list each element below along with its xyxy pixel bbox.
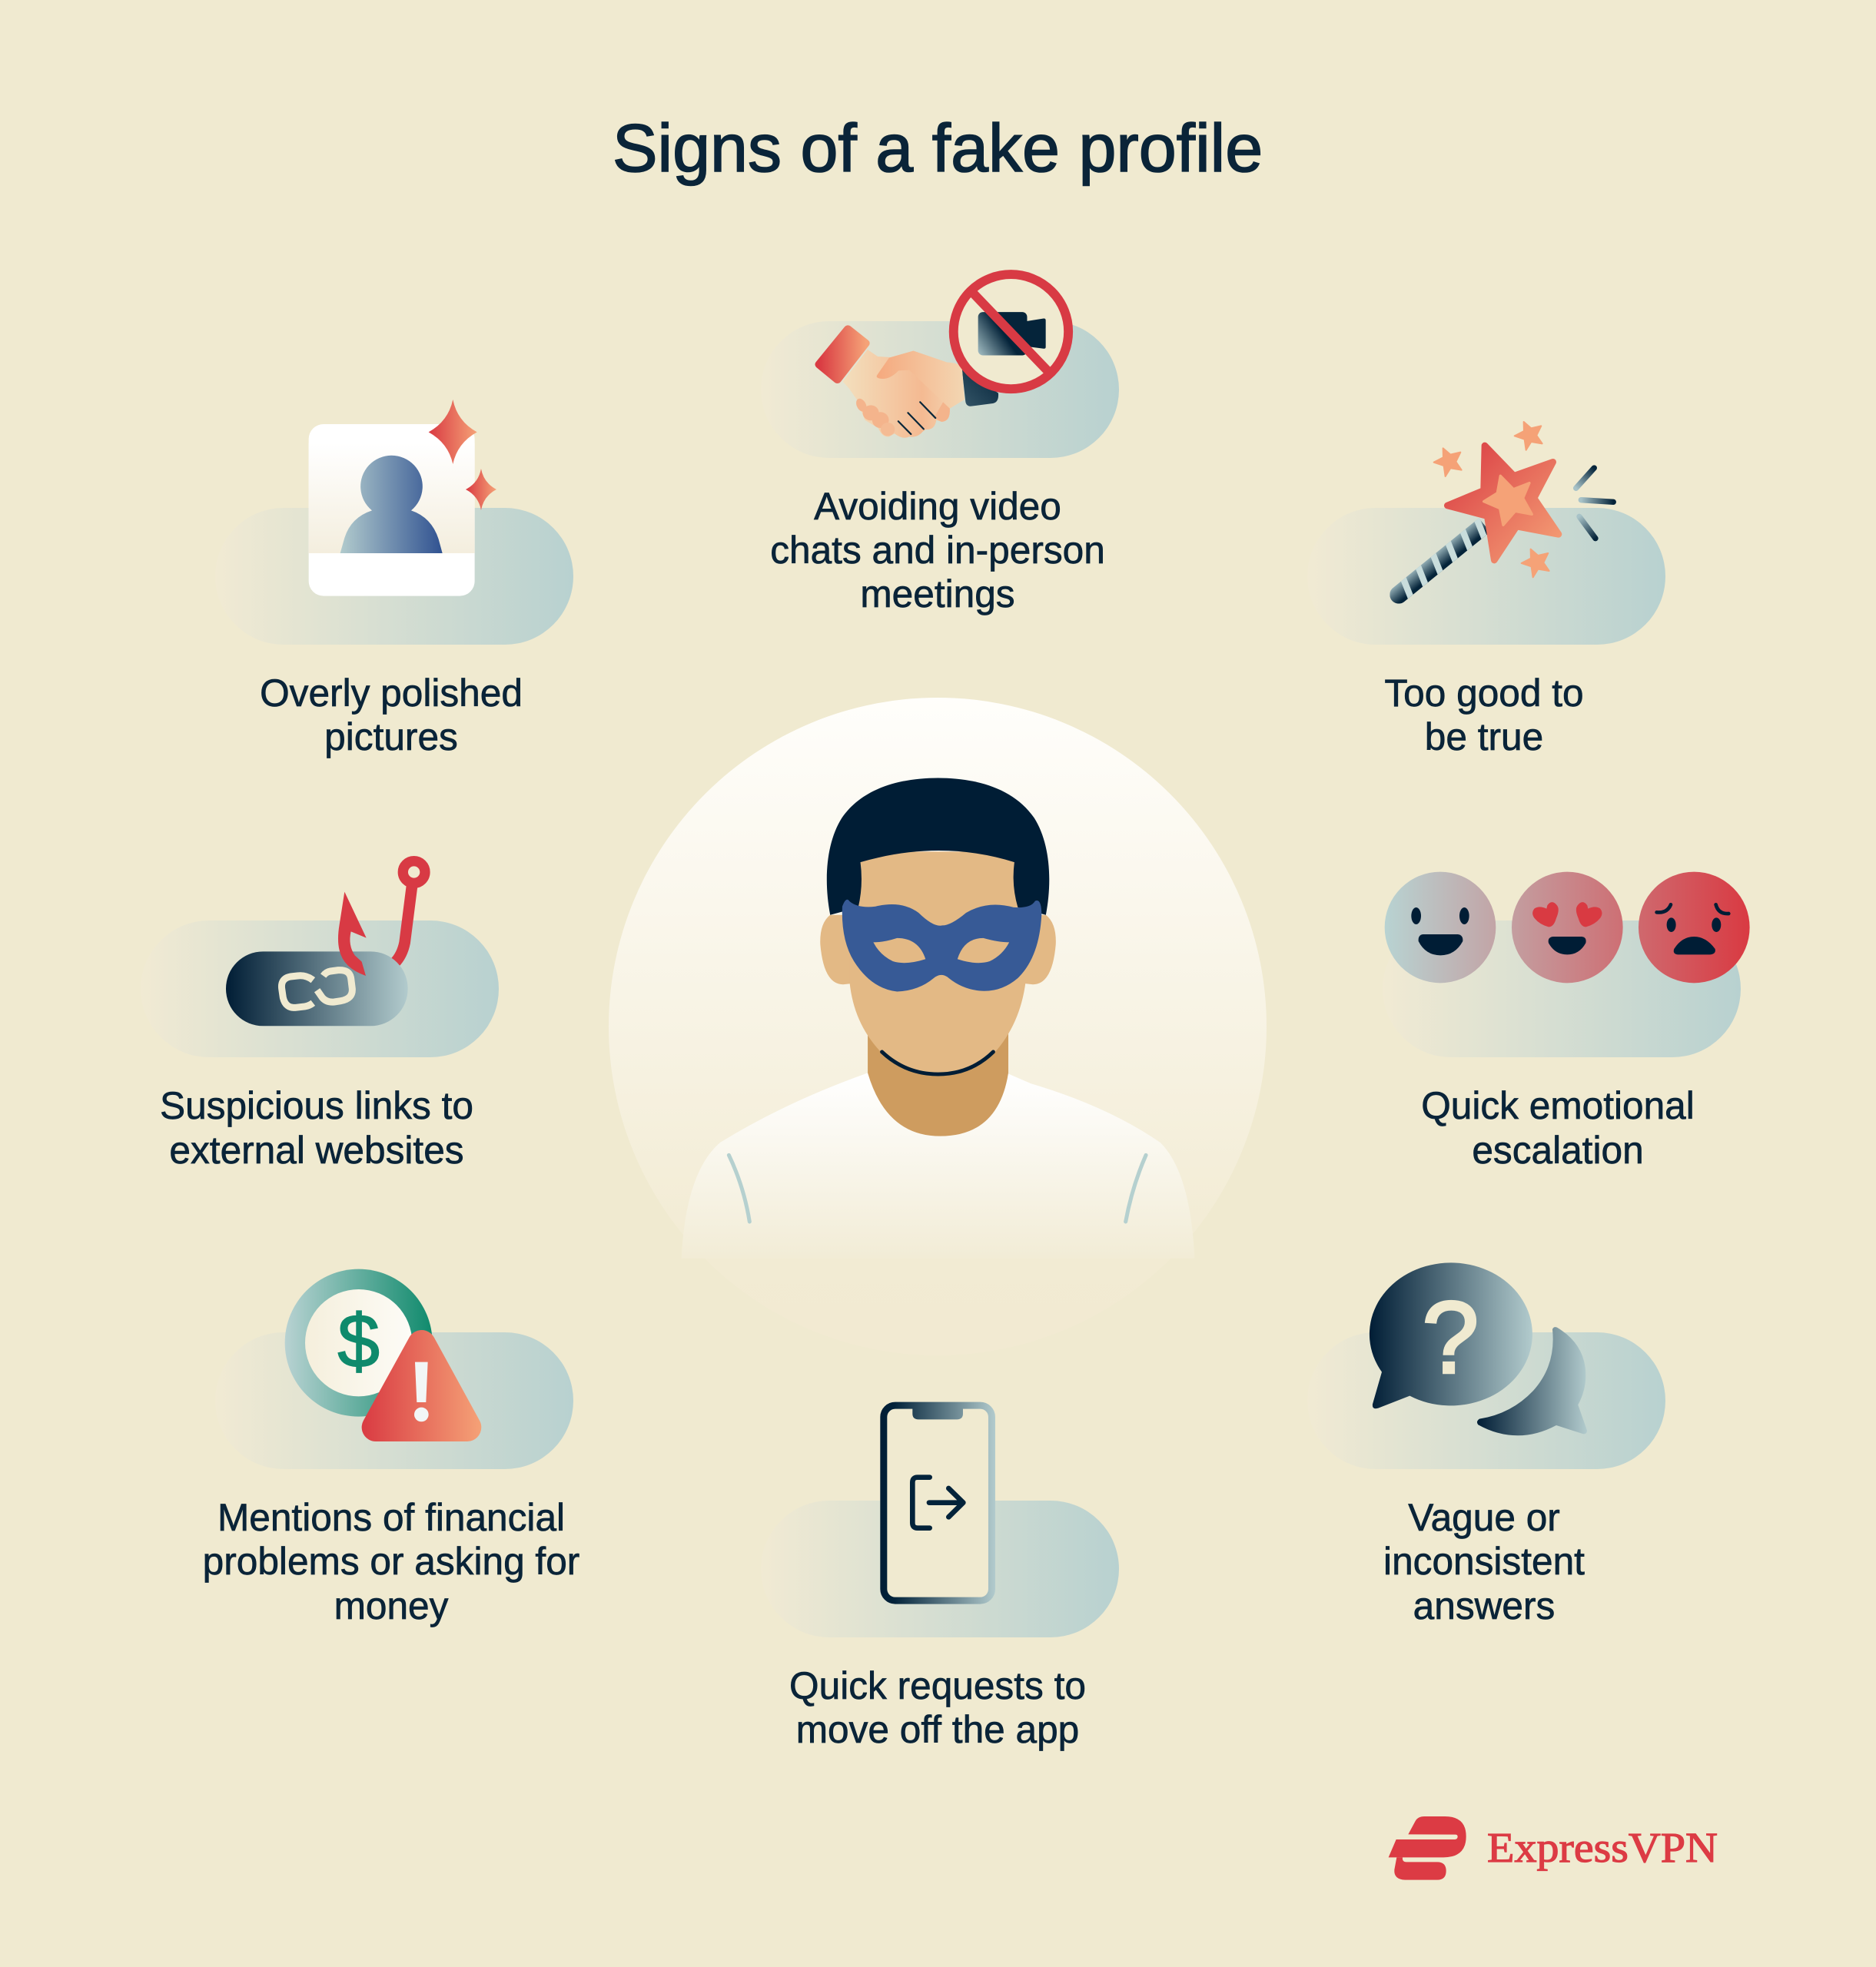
panel: financial problems [203, 1269, 579, 1627]
panel: financial problems: problems or asking for [203, 1540, 579, 1583]
icon: fish hook and broken link [226, 861, 425, 1026]
pill background [215, 1332, 573, 1469]
chin line [882, 1052, 993, 1074]
pill background [141, 920, 499, 1057]
caption: Overly polished [260, 672, 523, 715]
link pill [226, 951, 408, 1026]
user silhouette [340, 456, 443, 553]
exit arrow [912, 1478, 963, 1528]
panel: quick emotional escalation: escalation [1472, 1129, 1644, 1172]
panel: vague answers: answers [1413, 1584, 1555, 1627]
icon: phone with exit arrow [884, 1405, 991, 1600]
sparks [1576, 468, 1613, 539]
coin: $ [337, 1299, 380, 1383]
panel: financial problems: money [334, 1584, 449, 1627]
face [849, 851, 1031, 1074]
warning triangle [376, 1344, 467, 1428]
panel: quick requests to move off the app: move off the app [796, 1708, 1079, 1751]
hair [827, 778, 1049, 915]
panel: vague answers [1307, 1262, 1665, 1627]
icon: speech bubbles [1370, 1262, 1587, 1435]
mask [842, 900, 1041, 992]
logo mark [1389, 1816, 1466, 1880]
caption: Quick emotional [1421, 1084, 1695, 1127]
small stars [1434, 448, 1462, 476]
caption: Suspicious links to [160, 1084, 473, 1127]
logo wordmark: ExpressVPN [1487, 1824, 1718, 1871]
panel: suspicious links [141, 861, 499, 1172]
icon: polished photo card [309, 400, 496, 596]
caption: Vague or [1408, 1496, 1560, 1539]
coin [285, 1269, 433, 1417]
title: Signs of a fake profile [613, 110, 1263, 186]
heart-eyes face [1512, 872, 1623, 983]
panel: too good to be true: be true [1425, 715, 1543, 758]
mask eye holes [873, 938, 1009, 963]
large bubble [1370, 1262, 1532, 1408]
icon: three emoji faces [1385, 872, 1750, 983]
shirt creases [729, 1155, 1146, 1222]
icon: handshake with crossed-out camera [819, 274, 1068, 438]
small bubble [1477, 1327, 1587, 1435]
prohibition sign [954, 274, 1068, 389]
pill background [1307, 1332, 1665, 1469]
camera [978, 312, 1046, 355]
left sleeve [819, 329, 865, 380]
icon: magic wand [1389, 422, 1613, 605]
wand stick [1389, 516, 1491, 605]
large bubble: ? [1422, 1281, 1479, 1395]
torso [682, 1073, 1194, 1259]
broken chain link [281, 970, 352, 1007]
pill background [761, 1501, 1119, 1637]
panel: quick requests to move off the app [761, 1405, 1119, 1751]
panel: vague answers: inconsistent [1383, 1540, 1585, 1583]
panel: avoiding video chats: chats and in-person [770, 529, 1105, 572]
photo card [309, 424, 475, 596]
hook barb [338, 892, 367, 976]
caption: Quick requests to [789, 1664, 1086, 1707]
panel: overly polished pictures [215, 400, 573, 758]
caption: Too good to [1384, 672, 1584, 715]
panel: quick emotional escalation [1383, 872, 1750, 1172]
phone notch [912, 1408, 963, 1419]
pill background [1307, 508, 1665, 645]
panel: suspicious links: external websites [169, 1129, 464, 1172]
panel: too good to be true [1364, 421, 1665, 751]
panel: overly polished pictures: pictures [324, 715, 458, 758]
caption: Avoiding video [814, 485, 1061, 528]
ExpressVPN logo [1389, 1816, 1718, 1880]
pill background [1383, 920, 1741, 1057]
pill background [761, 321, 1119, 458]
caption: Mentions of financial [217, 1496, 565, 1539]
right sleeve [962, 369, 998, 406]
panel: avoiding video chats [761, 274, 1119, 615]
large star [1447, 446, 1559, 560]
ears [820, 915, 1056, 984]
halo circle [609, 698, 1267, 1355]
hands [843, 350, 965, 438]
neck [868, 1024, 1008, 1136]
sparkles [429, 400, 477, 464]
icon: coin and warning triangle [285, 1269, 467, 1428]
panel: avoiding video chats: meetings [860, 572, 1015, 615]
central masked figure [609, 698, 1267, 1355]
distressed face [1639, 872, 1750, 983]
pill background [215, 508, 573, 645]
phone body [884, 1405, 991, 1600]
happy face [1385, 872, 1496, 983]
hook shaft and eye [394, 861, 425, 963]
